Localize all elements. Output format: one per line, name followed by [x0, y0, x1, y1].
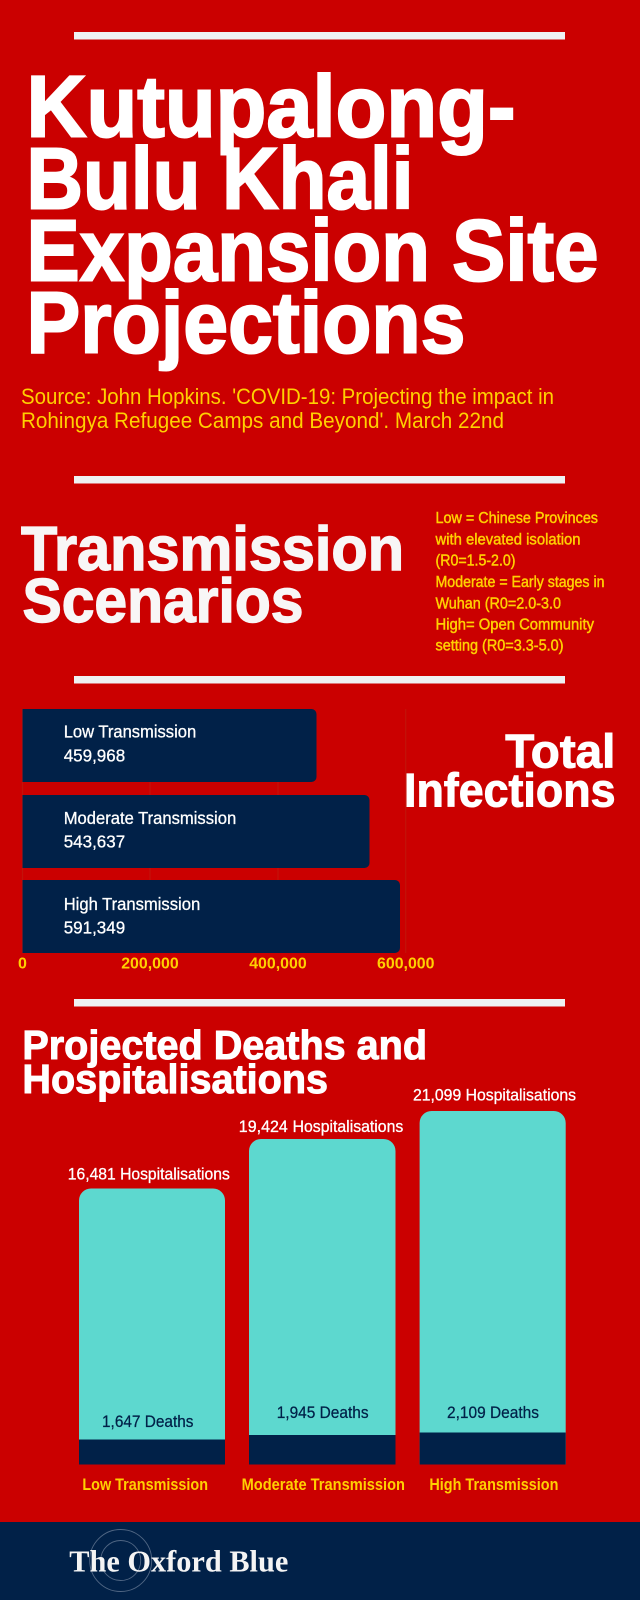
scenario definitions — [435, 510, 604, 655]
source note: Rohingya Refugee Camps and Beyond'. March 22nd — [21, 408, 504, 433]
title: Bulu Khali — [26, 131, 414, 228]
heading: transmission scenarios — [21, 515, 404, 636]
column: moderate transmission — [239, 1118, 405, 1494]
bar: moderate transmission: 543,637 — [64, 832, 125, 852]
column: moderate transmission: 1,945 Deaths — [277, 1404, 369, 1422]
column: low transmission: 16,481 Hospitalisations — [68, 1166, 230, 1184]
column: high transmission: High Transmission — [429, 1476, 558, 1494]
axis labels: 0 — [18, 956, 27, 972]
column: moderate transmission: Hospitalisations — [293, 1118, 403, 1136]
heading: projected deaths and hospitalisations: Hospitalisations — [22, 1056, 328, 1102]
bar: high transmission: High Transmission — [64, 894, 200, 914]
column: high transmission — [413, 1086, 576, 1494]
bar: low transmission: 459,968 — [64, 746, 125, 766]
bar chart: total infections — [18, 709, 435, 972]
source note — [21, 384, 554, 433]
scenario definitions: setting (R0=3.3-5.0) — [436, 638, 564, 655]
scenario definitions: Wuhan (R0=2.0-3.0 — [436, 595, 561, 612]
heading: transmission scenarios: Transmission — [21, 515, 404, 584]
column: moderate transmission: 19,424 — [239, 1118, 288, 1136]
title — [26, 59, 598, 372]
title: Projections — [26, 275, 466, 372]
bar: moderate transmission: Moderate Transmission — [64, 808, 236, 828]
logo wordmark: The Oxford Blue — [69, 1543, 288, 1578]
column: high transmission: 21,099 Hospitalisations — [413, 1086, 576, 1104]
scenario definitions: High= Open Community — [436, 616, 594, 633]
heading: transmission scenarios: Scenarios — [22, 567, 304, 636]
heading: projected deaths and hospitalisations: Projected Deaths and — [22, 1022, 427, 1068]
column: low transmission: 1,647 Deaths — [102, 1413, 194, 1431]
axis labels: 200,000 — [121, 956, 179, 972]
axis labels: 600,000 — [377, 956, 435, 972]
bar: low transmission: Low Transmission — [64, 722, 196, 742]
bar: moderate transmission — [22, 795, 370, 868]
scenario definitions: with elevated isolation — [435, 531, 580, 548]
scenario definitions: (R0=1.5-2.0) — [436, 552, 516, 569]
column: low transmission: Low Transmission — [82, 1476, 208, 1494]
axis labels: 400,000 — [249, 956, 307, 972]
column: moderate transmission: Moderate Transmission — [242, 1476, 405, 1494]
axis labels — [18, 956, 435, 972]
scenario definitions: Moderate = Early stages in — [436, 574, 604, 591]
column chart: deaths and hospitalisations — [68, 1086, 576, 1494]
heading: total infections: Infections — [404, 764, 616, 817]
heading: total infections — [404, 725, 616, 817]
source note: Source: John Hopkins. 'COVID-19: Projecting the impact in — [21, 384, 554, 409]
column: high transmission: 2,109 Deaths — [447, 1404, 539, 1422]
icon: concentric circles — [90, 1530, 152, 1592]
heading: projected deaths and hospitalisations — [22, 1022, 427, 1102]
footer band — [0, 1522, 640, 1600]
bar: low transmission — [22, 709, 316, 782]
title: Expansion Site — [26, 203, 598, 300]
bar: high transmission: 591,349 — [64, 918, 125, 938]
title: Kutupalong- — [26, 59, 516, 156]
heading: total infections: Total — [505, 725, 615, 778]
bar: high transmission — [22, 880, 400, 953]
scenario definitions: Low = Chinese Provinces — [436, 510, 598, 527]
column: low transmission — [68, 1166, 230, 1494]
